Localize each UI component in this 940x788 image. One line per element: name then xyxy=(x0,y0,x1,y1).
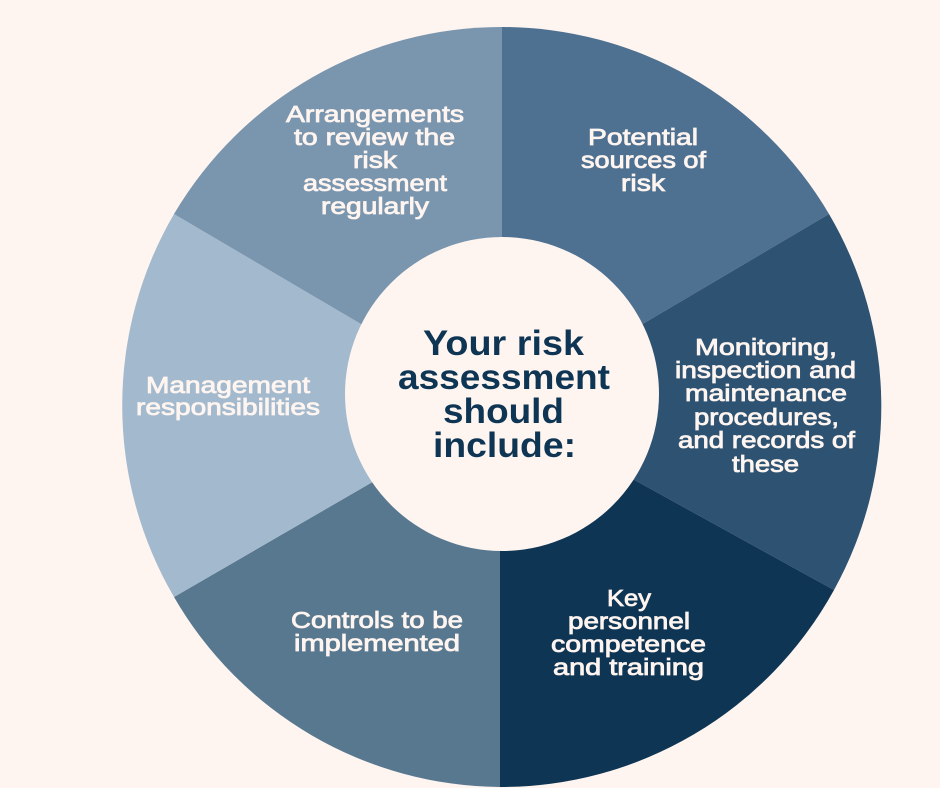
label: key personnel competence and training xyxy=(551,585,706,680)
label: management responsibilities xyxy=(136,372,320,420)
label: monitoring, inspection and maintenance: Monitoring, xyxy=(695,334,837,360)
label: arrangements to review xyxy=(286,101,464,219)
segment: key personnel competence and training xyxy=(500,407,834,787)
label: potential sources of risk: risk xyxy=(621,170,665,196)
segment: monitoring, inspection and maintenance xyxy=(502,214,881,590)
label: key personnel competence and training: competence xyxy=(551,631,706,657)
label: controls to be implemented xyxy=(291,607,463,656)
label: key personnel competence and training: personnel xyxy=(568,608,690,634)
label: potential sources of risk xyxy=(581,124,707,196)
segment: management responsibilities xyxy=(122,214,502,597)
centre heading: should xyxy=(443,391,564,431)
label: arrangements to review: regularly xyxy=(321,193,429,219)
label: arrangements to review: to review the xyxy=(294,124,455,150)
label: potential sources of risk: Potential xyxy=(588,124,698,150)
label: monitoring, inspection and maintenance: maintenance xyxy=(685,380,847,406)
centre heading: assessment xyxy=(398,357,610,397)
label: monitoring, inspection and maintenance: inspection and xyxy=(675,357,856,383)
label: potential sources of risk: sources of xyxy=(581,147,707,173)
label: arrangements to review: assessment xyxy=(303,170,448,196)
label: controls to be implemented: implemented xyxy=(294,630,460,656)
segment: arrangements to review xyxy=(174,27,502,407)
label: monitoring, inspection and maintenance xyxy=(675,334,856,477)
label: arrangements to review: Arrangements xyxy=(286,101,464,127)
label: key personnel competence and training: and training xyxy=(553,654,704,680)
label: management responsibilities: Management xyxy=(146,372,311,398)
label: controls to be implemented: Controls to be xyxy=(291,607,463,633)
centre circle xyxy=(345,237,659,551)
label: key personnel competence and training: Key xyxy=(607,585,651,611)
centre heading: include: xyxy=(433,425,576,465)
label: monitoring, inspection and maintenance: and records of xyxy=(678,427,856,453)
label: monitoring, inspection and maintenance: procedures, xyxy=(694,404,839,430)
centre heading: Your risk xyxy=(423,323,584,363)
centre heading xyxy=(398,323,610,465)
label: management responsibilities: responsibilities xyxy=(136,394,320,420)
label: arrangements to review: risk xyxy=(353,147,397,173)
segment: controls to be implemented xyxy=(174,407,502,787)
segment: potential sources of risk xyxy=(502,27,829,407)
label: monitoring, inspection and maintenance: these xyxy=(732,451,799,477)
